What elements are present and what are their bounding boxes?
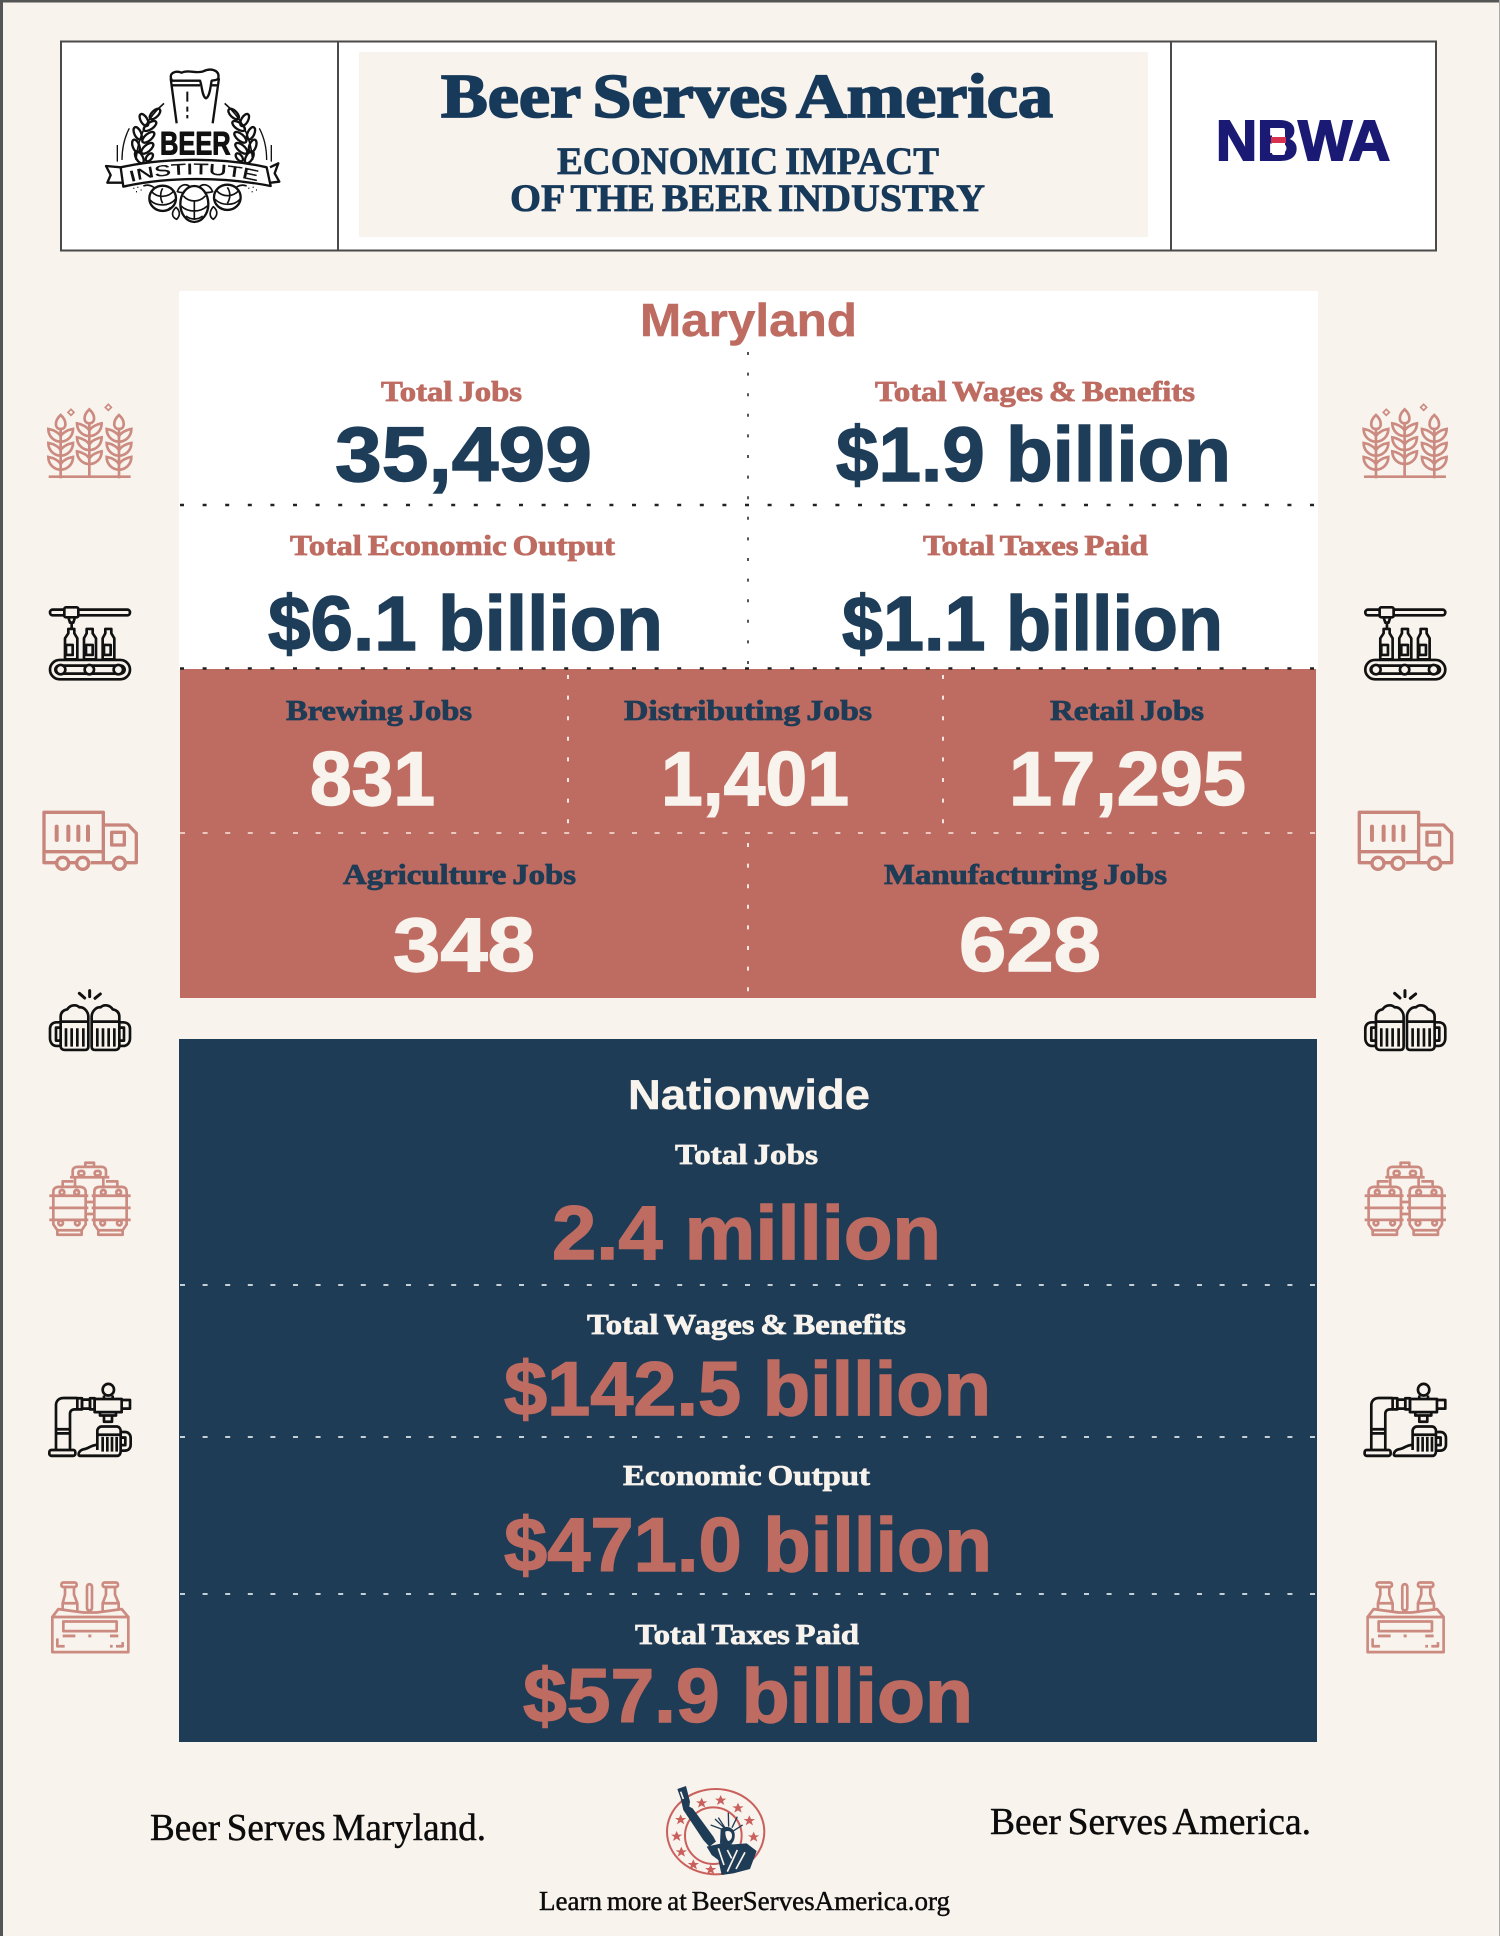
title plate (359, 52, 1148, 237)
icon: kegs left (49, 1163, 131, 1235)
stat: brewing jobs (286, 696, 472, 822)
stat: retail jobs: Retail Jobs (1050, 696, 1204, 727)
subtitle line 1: ECONOMIC IMPACT (557, 140, 939, 183)
stat: total economic output (268, 530, 663, 667)
stat: total economic output: Total Economic Output (290, 530, 615, 562)
heading: Nationwide: Nationwide (628, 1071, 870, 1118)
torch and raised arm (677, 1786, 716, 1847)
stat: total wages and benefits: Total Wages & Benefits (875, 376, 1195, 408)
icon: wheat left (48, 404, 131, 478)
stat: agriculture jobs: 348 (393, 903, 535, 988)
stat: distributing jobs: Distributing Jobs (624, 696, 872, 727)
stat: retail jobs: 17,295 (1009, 737, 1246, 822)
stat: brewing jobs: Brewing Jobs (286, 696, 472, 727)
stat: distributing jobs (624, 696, 872, 822)
footer text: website link: Learn more at BeerServesAmerica.org (539, 1886, 950, 1916)
logo: NBWA: NBWA (1216, 109, 1390, 173)
stat: agriculture jobs: Agriculture Jobs (343, 860, 576, 891)
icon: delivery truck right (1359, 812, 1452, 869)
footer text: Beer Serves America: Beer Serves America. (990, 1801, 1311, 1843)
stat: total taxes paid (842, 530, 1223, 667)
panel: Nationwide (179, 1039, 1317, 1742)
stat: national total jobs: 2.4 million (552, 1191, 941, 1276)
stat: national taxes paid: $57.9 billion (523, 1654, 973, 1739)
stat: total wages and benefits: $1.9 billion (836, 412, 1231, 498)
title: Beer Serves America (441, 63, 1053, 131)
icon: wheat right (1364, 404, 1447, 478)
icon: clinking mugs right (1365, 991, 1445, 1050)
stat: brewing jobs: 831 (310, 737, 435, 822)
icon: delivery truck left (44, 812, 136, 869)
stat: national taxes paid: Total Taxes Paid (635, 1620, 859, 1651)
stat: agriculture jobs (343, 860, 576, 988)
stat: national wages and benefits (504, 1310, 991, 1432)
icon: clinking mugs left (50, 991, 130, 1050)
stat: national wages and benefits: $142.5 billion (504, 1347, 991, 1432)
header band (60, 40, 1437, 252)
stat: national wages and benefits: Total Wages & Benefits (587, 1310, 906, 1341)
stat: manufacturing jobs (884, 860, 1167, 988)
stat: total jobs: 35,499 (335, 412, 592, 498)
icon: kegs right (1365, 1163, 1446, 1235)
heading: Maryland: Maryland (640, 294, 857, 346)
stat: national total jobs (552, 1140, 941, 1276)
stat: total jobs (335, 376, 592, 498)
icon: beer tap left (49, 1384, 131, 1456)
logo: Statue of Liberty seal (667, 1786, 764, 1875)
stat: manufacturing jobs: 628 (959, 903, 1101, 988)
stat: total economic output: $6.1 billion (268, 581, 663, 667)
icon: six pack left (52, 1583, 128, 1652)
stat: national economic output (504, 1461, 992, 1588)
stat: national total jobs: Total Jobs (675, 1140, 818, 1171)
stat: national taxes paid (523, 1620, 973, 1739)
stat: retail jobs (1009, 696, 1246, 822)
stat: total jobs: Total Jobs (381, 376, 522, 408)
stat: total taxes paid: $1.1 billion (842, 581, 1223, 667)
icon: six pack right (1368, 1583, 1444, 1652)
logo: Beer Institute: BEER (160, 124, 231, 161)
logo: Beer Institute (104, 68, 280, 224)
stat: manufacturing jobs: Manufacturing Jobs (884, 860, 1167, 891)
panel: Maryland jobs by sector (180, 668, 1320, 998)
icon: bottling conveyor left (50, 607, 130, 679)
stat: total taxes paid: Total Taxes Paid (923, 530, 1148, 562)
footer text: Beer Serves Maryland: Beer Serves Maryland. (150, 1807, 486, 1849)
stat: national economic output: Economic Output (623, 1461, 871, 1492)
icon: bottling conveyor right (1365, 607, 1445, 679)
stat: distributing jobs: 1,401 (661, 737, 849, 822)
icon: beer tap right (1365, 1384, 1446, 1456)
logo: Beer Institute: INSTITUTE (130, 163, 258, 182)
panel: Maryland statewide totals (179, 291, 1320, 669)
subtitle line 2: OF THE BEER INDUSTRY (510, 177, 985, 220)
stat: national economic output: $471.0 billion (504, 1503, 992, 1588)
